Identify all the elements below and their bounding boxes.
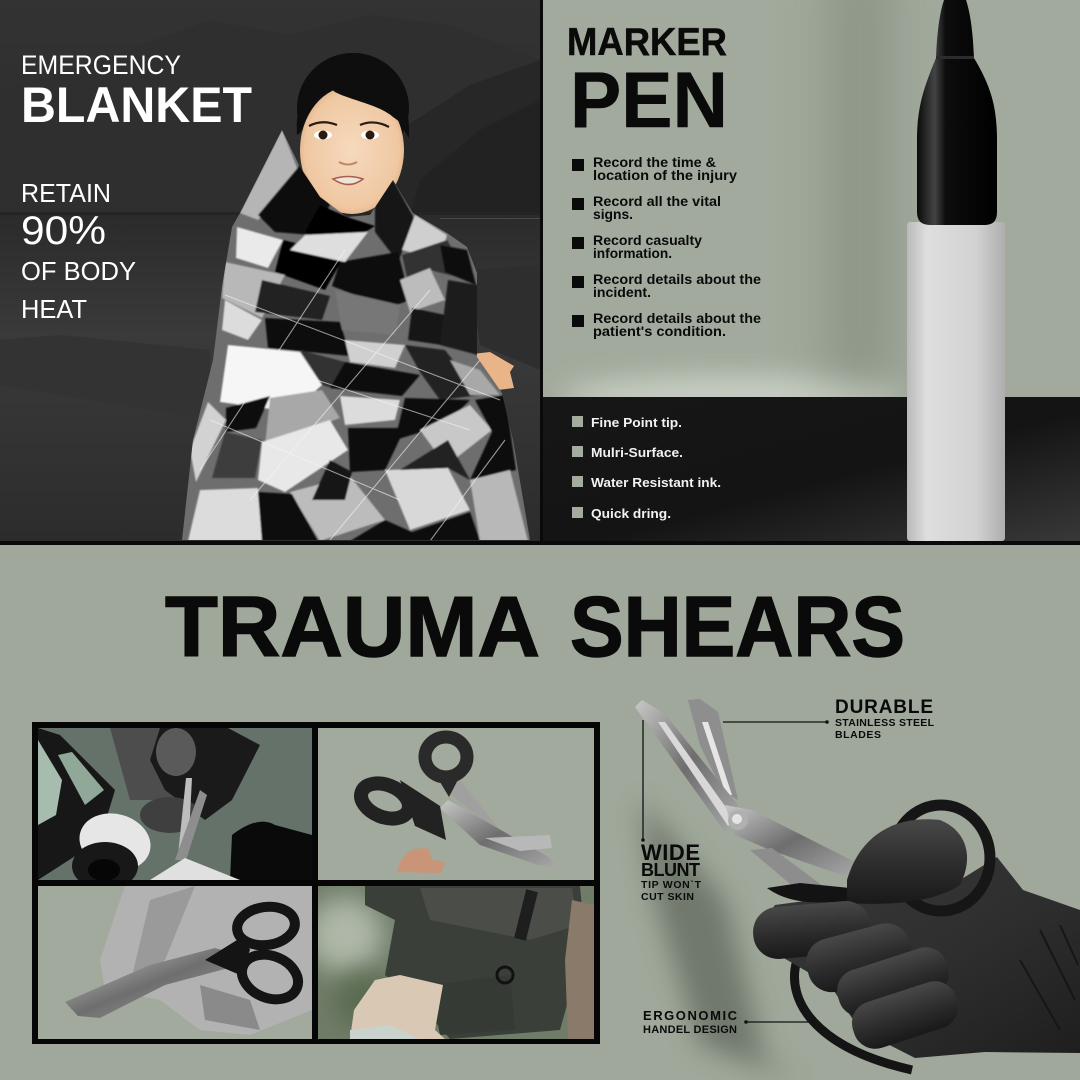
list: pen features: Quick dring.: [591, 506, 671, 521]
heading: marker pen: MARKER: [567, 21, 727, 64]
callout: wide blunt: WIDE: [641, 840, 700, 865]
photo: backpack outdoors: [307, 886, 594, 1039]
text: retain 90% of body heat: [21, 178, 136, 324]
hand: [472, 352, 514, 390]
list: recording uses: Record casualty: [593, 233, 703, 248]
title: SHEARS: [570, 580, 905, 675]
list: recording uses: Record details about the: [593, 272, 762, 287]
list: recording uses: Record details about the: [593, 311, 762, 326]
list: recording uses: Record all the vital: [593, 194, 721, 209]
cast shadow: [640, 800, 800, 1080]
title: [165, 580, 905, 675]
panel dividers: [0, 0, 1080, 545]
glove palm: [760, 857, 1080, 1058]
text: retain 90% of body heat: RETAIN: [21, 178, 111, 208]
photo grid: [32, 722, 600, 1044]
list: recording uses: patient's condition.: [593, 324, 726, 339]
callout: wide blunt: [641, 720, 702, 903]
panel: trauma shears: [32, 596, 1080, 1075]
list: recording uses: signs.: [593, 207, 633, 222]
text: retain 90% of body heat: 90%: [21, 209, 106, 253]
list: pen features: [572, 415, 721, 521]
heading: emergency blanket: BLANKET: [21, 77, 252, 133]
heading: marker pen: PEN: [570, 55, 728, 144]
heading: emergency blanket: [21, 50, 252, 133]
list: recording uses: incident.: [593, 285, 651, 300]
list: pen features: Mulri-Surface.: [591, 445, 683, 460]
pen shadow: [830, 0, 890, 390]
callout: wide blunt: CUT SKIN: [641, 891, 694, 903]
upper handle ring: [892, 805, 990, 911]
list: recording uses: [572, 155, 762, 339]
text: retain 90% of body heat: HEAT: [21, 294, 87, 324]
heading: emergency blanket: EMERGENCY: [21, 50, 181, 80]
list: recording uses: Record the time &: [593, 155, 716, 170]
title: TRAUMA: [165, 580, 540, 675]
background: mountain lake: [0, 15, 540, 420]
callout: wide blunt: BLUNT: [641, 860, 700, 880]
callout: ergonomic: [643, 1008, 815, 1036]
blades: [635, 699, 855, 905]
marker pen illustration: [907, 0, 1005, 541]
text: retain 90% of body heat: OF BODY: [21, 256, 136, 286]
panel: emergency blanket: [0, 0, 540, 545]
callout: wide blunt: TIP WON`T: [641, 879, 702, 891]
handle shank: [767, 883, 858, 906]
panel: marker pen: [543, 0, 1080, 541]
woman's head: [297, 53, 409, 214]
list: recording uses: information.: [593, 246, 672, 261]
foil blanket: [170, 120, 540, 545]
photo: shears on sage: [318, 728, 594, 880]
photo: shears on fabric: [38, 886, 312, 1039]
callout: ergonomic: HANDEL DESIGN: [643, 1024, 737, 1036]
callout: durable: [723, 697, 935, 741]
callout: durable: DURABLE: [835, 697, 933, 718]
copper fragment: [397, 848, 445, 873]
photo: cutting bandage: [38, 728, 312, 890]
heading: marker pen: [567, 21, 728, 144]
shears and gloved hand: [635, 699, 1080, 1080]
callout: durable: STAINLESS STEEL: [835, 717, 935, 729]
dark feature band: [543, 397, 1080, 541]
list: pen features: Fine Point tip.: [591, 415, 682, 430]
lower handle ring: [794, 960, 912, 1070]
list: pen features: Water Resistant ink.: [591, 475, 721, 490]
callout: durable: BLADES: [835, 729, 881, 741]
callout: ergonomic: ERGONOMIC: [643, 1008, 738, 1023]
list: recording uses: location of the injury: [593, 168, 738, 183]
gloved fingers and thumb: [751, 819, 1078, 1055]
